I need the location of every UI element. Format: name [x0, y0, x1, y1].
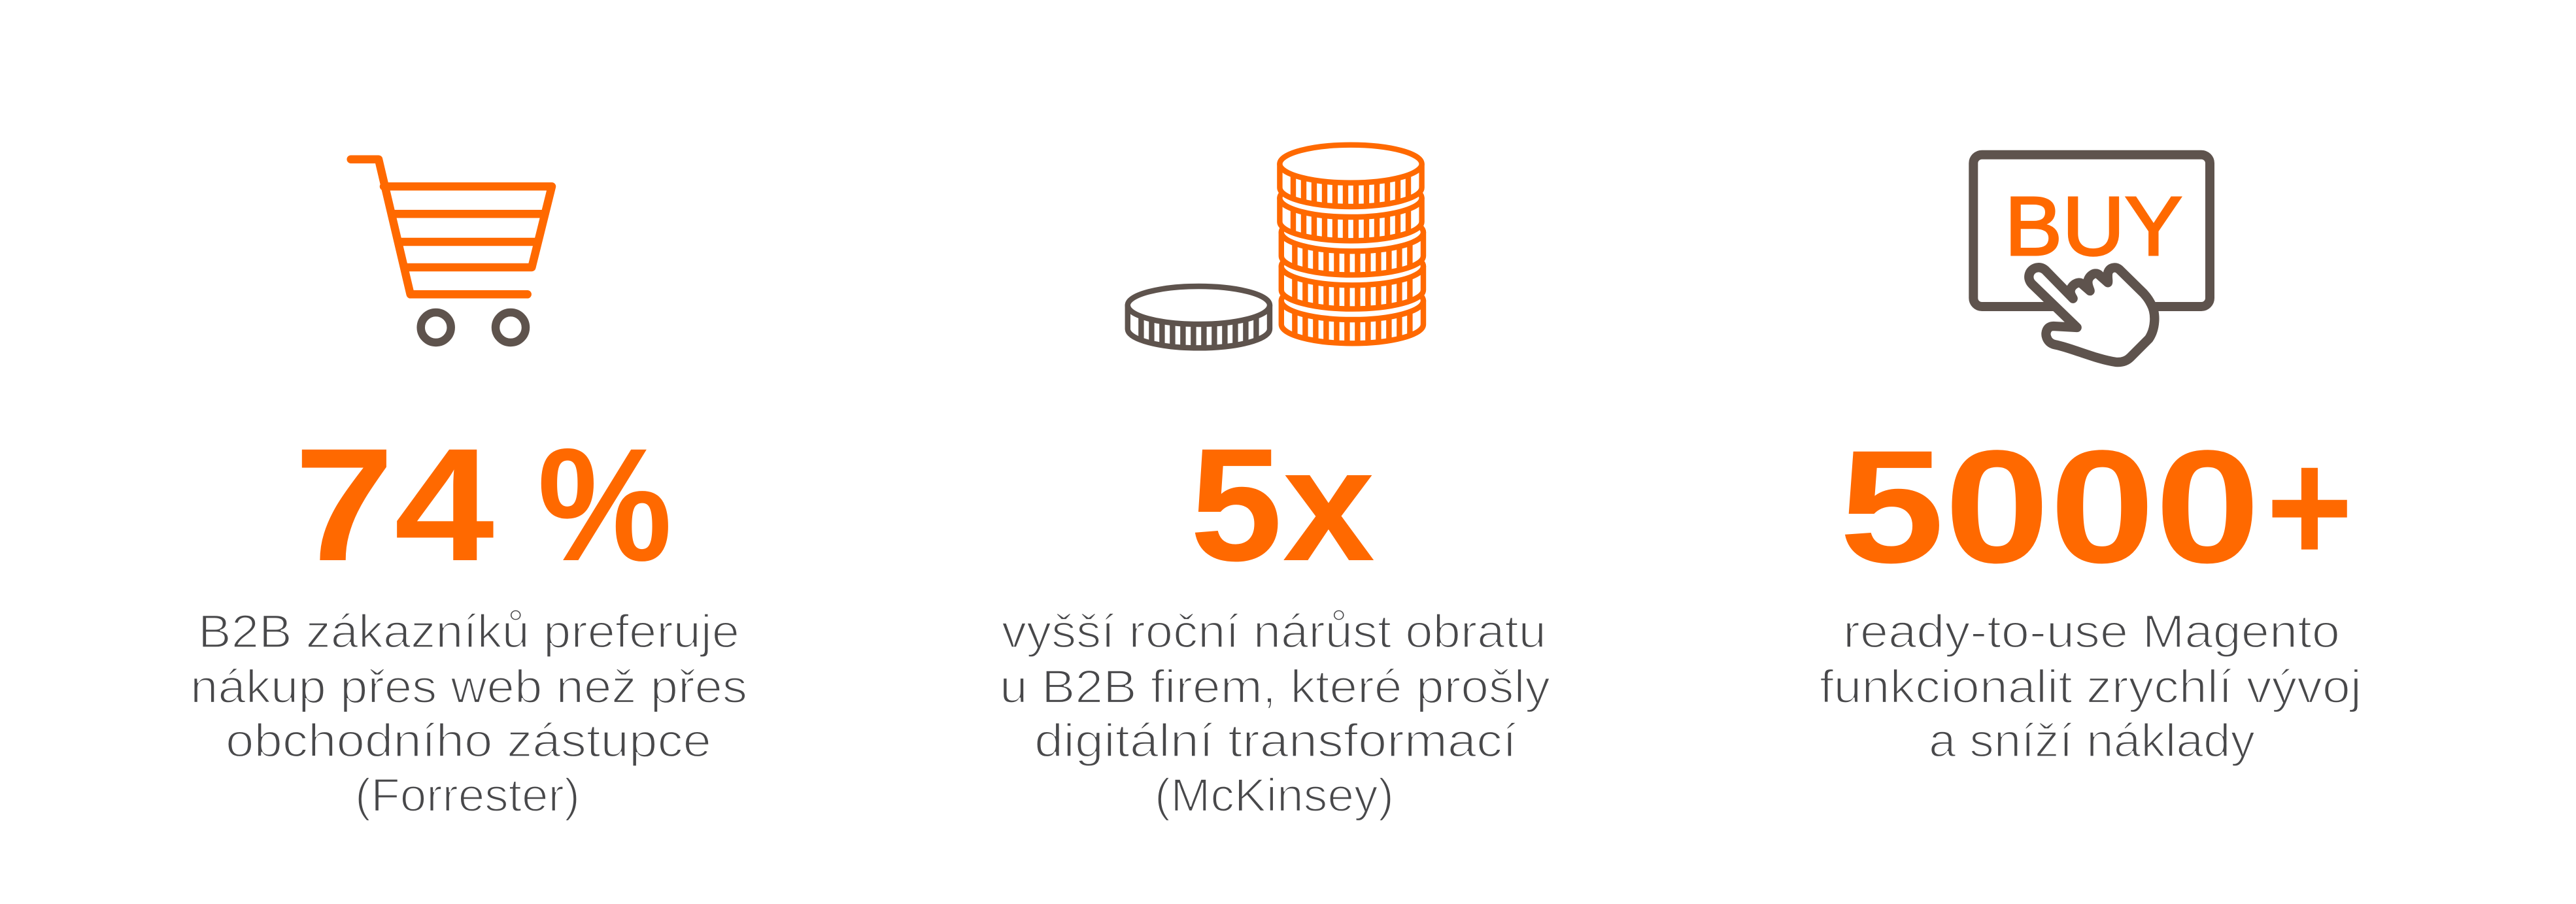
text block: customers description: obchodního zástupce — [226, 715, 711, 767]
text block: customers description — [190, 607, 747, 822]
text block: customers description: B2B zákazníků preferuje — [198, 607, 739, 658]
text block: customers description: nákup přes web než přes — [190, 661, 747, 713]
panel: 5x revenue growth — [1000, 145, 1551, 822]
big number: 74 % — [294, 415, 672, 595]
icon: orange coin stack — [1280, 145, 1423, 343]
big number: 74 %: 74 — [294, 415, 494, 595]
text block: growth description: digitální transformací — [1034, 715, 1517, 767]
text block: Magento description: funkcionalit zrychlí vývoj — [1820, 661, 2362, 713]
text block: Magento description: a sníží náklady — [1929, 715, 2256, 767]
text block: growth description: vyšší roční nárůst obratu — [1002, 607, 1546, 658]
text block: Magento description: ready-to-use Magento — [1843, 607, 2340, 658]
hand — [2029, 267, 2154, 362]
panel: 74 % B2B customers — [190, 159, 747, 822]
panel: 5000+ Magento features — [1820, 155, 2362, 767]
icon: buy button with pointing hand — [1973, 155, 2210, 362]
BUY label: BUY — [2005, 180, 2182, 273]
screen frame — [1973, 155, 2210, 307]
text block: growth description — [1000, 607, 1551, 822]
text block: customers description: (Forrester) — [355, 770, 580, 822]
icon: coins — [1128, 145, 1423, 348]
icon: shopping cart — [351, 159, 552, 343]
icon: single brown coin — [1128, 286, 1270, 348]
big number: 5x: 5x — [1190, 415, 1375, 595]
big number: 74 %: % — [537, 415, 672, 595]
big number: 5000+: 5000 — [1839, 417, 2260, 597]
text block: Magento description — [1820, 607, 2362, 767]
text block: growth description: u B2B firem, které prošly — [1000, 661, 1551, 713]
text block: growth description: (McKinsey) — [1155, 770, 1394, 822]
big number: 5000+: + — [2266, 417, 2353, 597]
big number: 5000+ — [1839, 417, 2353, 597]
